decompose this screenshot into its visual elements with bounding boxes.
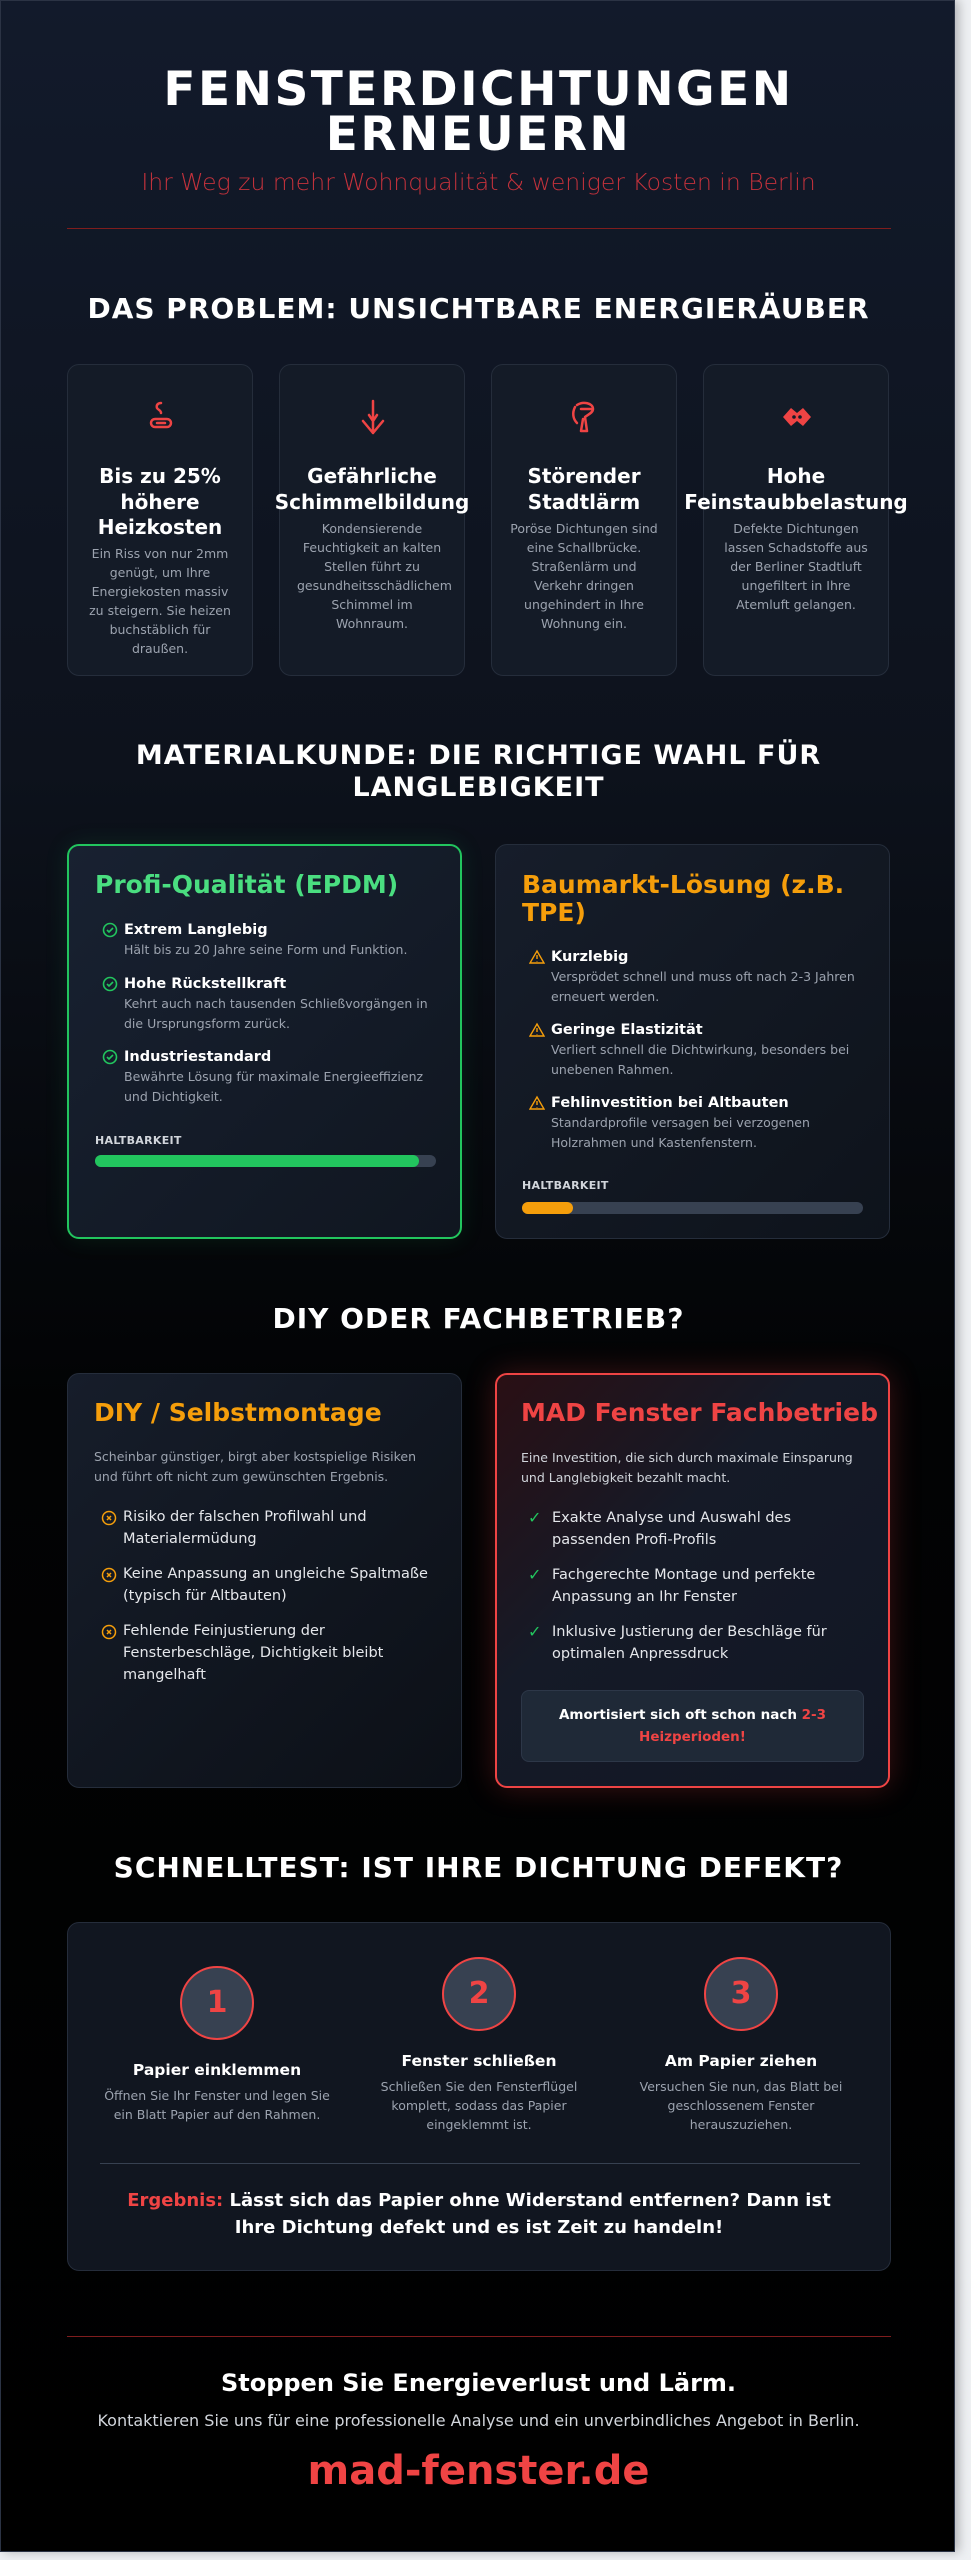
panel: MAD Fachbetrieb xyxy=(495,1373,890,1788)
item: industriestandard xyxy=(102,1049,423,1104)
item: montage: Fachgerechte Montage und perfekte Anpassung an Ihr Fenster xyxy=(552,1567,815,1605)
item: fehlinvestition: Fehlinvestition bei Altbauten xyxy=(551,1095,789,1111)
bar chart: EPDM xyxy=(95,1155,436,1167)
item: rueckstellkraft: Kehrt auch nach tausenden Schließvorgängen in die Ursprungsform zurück. xyxy=(124,996,428,1031)
item: rueckstellkraft xyxy=(102,976,428,1031)
panel: DIY xyxy=(67,1373,462,1788)
MAD description: Eine Investition, die sich durch maximale Einsparung und Langlebigkeit bezahlt macht. xyxy=(521,1450,853,1485)
heading: materialkunde: MATERIALKUNDE: DIE RICHTIGE WAHL FÜR xyxy=(136,740,821,771)
item: elastizitaet xyxy=(529,1022,849,1077)
icon: heat xyxy=(150,402,172,428)
bar chart: TPE xyxy=(522,1202,863,1214)
CTA heading: Stoppen Sie Energieverlust und Lärm. xyxy=(221,2369,736,2397)
DIY title: DIY / Selbstmontage xyxy=(94,1398,382,1427)
step 3 xyxy=(640,1957,842,2132)
callout: amortisation xyxy=(521,1690,864,1762)
card: schimmel xyxy=(279,364,465,676)
panel: EPDM xyxy=(67,844,462,1239)
card: heizkosten: Heizkosten xyxy=(98,515,222,539)
step 1: 1 xyxy=(207,1985,227,2020)
step 2: 2 xyxy=(469,1976,489,2011)
card: heizkosten: Ein Riss von nur 2mm genügt, um Ihre Energiekosten massiv zu steigern. Sie heizen buchstäblich für draußen. xyxy=(89,546,231,656)
card: laerm xyxy=(491,364,677,676)
item: kurzlebig: Kurzlebig xyxy=(551,949,628,965)
step 1: Öffnen Sie Ihr Fenster und legen Sie ein Blatt Papier auf den Rahmen. xyxy=(104,2088,330,2122)
title: ERNEUERN xyxy=(326,107,631,162)
item: langlebig: Extrem Langlebig xyxy=(124,922,268,938)
result text xyxy=(127,2190,831,2238)
heading: DIY: DIY ODER FACHBETRIEB? xyxy=(272,1302,684,1335)
card: laerm: Poröse Dichtungen sind eine Schallbrücke. Straßenlärm und Verkehr dringen ungehindert in Ihre Wohnung ein. xyxy=(510,521,658,631)
card: schimmel: Schimmelbildung xyxy=(275,490,469,514)
heading: materialkunde xyxy=(136,739,821,803)
card: laerm: Störender xyxy=(527,464,641,488)
website: mad-fenster.de xyxy=(308,2448,649,2494)
TPE title: Baumarkt-Lösung (z.B. xyxy=(522,870,844,899)
item: industriestandard: Bewährte Lösung für maximale Energieeffizienz und Dichtigkeit. xyxy=(124,1069,423,1104)
step 1: Papier einklemmen xyxy=(133,2061,301,2079)
panel: MAD Fachbetrieb: ✓ xyxy=(528,1622,541,1641)
TPE title: TPE) xyxy=(522,898,586,927)
item: langlebig: Hält bis zu 20 Jahre seine Form und Funktion. xyxy=(124,942,407,957)
step 2 xyxy=(381,1957,577,2132)
item: rueckstellkraft: Hohe Rückstellkraft xyxy=(124,976,286,992)
EPDM title: Profi-Qualität (EPDM) xyxy=(95,870,398,899)
step 3: Am Papier ziehen xyxy=(665,2052,817,2070)
item: industriestandard: Industriestandard xyxy=(124,1049,271,1065)
panel: MAD Fachbetrieb: ✓ xyxy=(528,1565,541,1584)
item: fehlinvestition xyxy=(529,1095,810,1150)
step 2: Schließen Sie den Fensterflügel komplett, sodass das Papier eingeklemmt ist. xyxy=(381,2079,577,2132)
panel: schnelltest xyxy=(67,1922,891,2271)
item: risiko: Risiko der falschen Profilwahl und Materialermüdung xyxy=(123,1509,367,1547)
result text: Ihre Dichtung defekt und es ist Zeit zu handeln! xyxy=(235,2217,723,2238)
card: feinstaub: Hohe xyxy=(767,464,825,488)
card: laerm: Stadtlärm xyxy=(528,490,640,514)
item: analyse: Exakte Analyse und Auswahl des passenden Profi-Profils xyxy=(552,1510,791,1548)
card: feinstaub: Feinstaubbelastung xyxy=(684,490,908,514)
DIY description: Scheinbar günstiger, birgt aber kostspielige Risiken und führt oft nicht zum gewünschten Ergebnis. xyxy=(94,1449,416,1484)
item: justierung: Inklusive Justierung der Beschläge für optimalen Anpressdruck xyxy=(552,1624,827,1662)
item: feinjustierung: Fehlende Feinjustierung der Fensterbeschläge, Dichtigkeit bleibt mangelhaft xyxy=(123,1623,383,1683)
heading: materialkunde: LANGLEBIGKEIT xyxy=(352,772,605,803)
step 3: Versuchen Sie nun, das Blatt bei geschlossenem Fenster herauszuziehen. xyxy=(640,2079,842,2132)
title xyxy=(163,62,794,162)
heading: problem: DAS PROBLEM: UNSICHTBARE ENERGIERÄUBER xyxy=(87,292,870,325)
title: FENSTERDICHTUNGEN xyxy=(163,62,794,117)
item: kurzlebig xyxy=(529,949,855,1004)
card: feinstaub: Defekte Dichtungen lassen Schadstoffe aus der Berliner Stadtluft ungefiltert in Ihre Atemluft gelangen. xyxy=(724,521,868,612)
panel: MAD Fachbetrieb: ✓ xyxy=(528,1508,541,1527)
item: elastizitaet: Geringe Elastizität xyxy=(551,1022,703,1038)
icon: drop arrow xyxy=(362,400,384,434)
card: heizkosten: höhere xyxy=(120,490,200,514)
card: feinstaub xyxy=(703,364,889,676)
item: fehlinvestition: Standardprofile versagen bei verzogenen Holzrahmen und Kastenfenstern. xyxy=(551,1115,810,1150)
TPE title xyxy=(522,870,844,927)
durability label: HALTBARKEIT xyxy=(522,1179,609,1192)
item: elastizitaet: Verliert schnell die Dichtwirkung, besonders bei unebenen Rahmen. xyxy=(551,1042,849,1077)
step 2: Fenster schließen xyxy=(402,2052,556,2070)
heading: schnelltest: SCHNELLTEST: IST IHRE DICHTUNG DEFEKT? xyxy=(114,1851,843,1884)
step 1 xyxy=(104,1966,330,2122)
subtitle: Ihr Weg zu mehr Wohnqualität & weniger Kosten in Berlin xyxy=(141,168,816,196)
card: schimmel: Kondensierende Feuchtigkeit an kalten Stellen führt zu gesundheitsschädlichem Schimmel im Wohnraum. xyxy=(297,521,452,631)
card: schimmel: Gefährliche xyxy=(307,464,437,488)
CTA text: Kontaktieren Sie uns für eine professionelle Analyse und ein unverbindliches Angebot in Berlin. xyxy=(97,2411,860,2430)
item: anpassung: Keine Anpassung an ungleiche Spaltmaße (typisch für Altbauten) xyxy=(123,1566,428,1604)
result text: Ergebnis: Lässt sich das Papier ohne Widerstand entfernen? Dann ist xyxy=(127,2190,831,2211)
icon: sound xyxy=(572,402,594,432)
callout: amortisation: Amortisiert sich oft schon nach 2-3 Heizperioden! xyxy=(559,1707,826,1745)
card: heizkosten xyxy=(67,364,253,676)
panel: TPE xyxy=(495,844,890,1239)
step 3: 3 xyxy=(731,1976,751,2011)
icon: particles xyxy=(783,408,811,426)
durability label: HALTBARKEIT xyxy=(95,1134,182,1147)
MAD title: MAD Fenster Fachbetrieb xyxy=(521,1398,878,1427)
panel: problem cards xyxy=(67,364,908,676)
card: heizkosten: Bis zu 25% xyxy=(99,464,221,488)
item: kurzlebig: Versprödet schnell und muss oft nach 2-3 Jahren erneuert werden. xyxy=(551,969,855,1004)
item: langlebig xyxy=(102,922,407,957)
